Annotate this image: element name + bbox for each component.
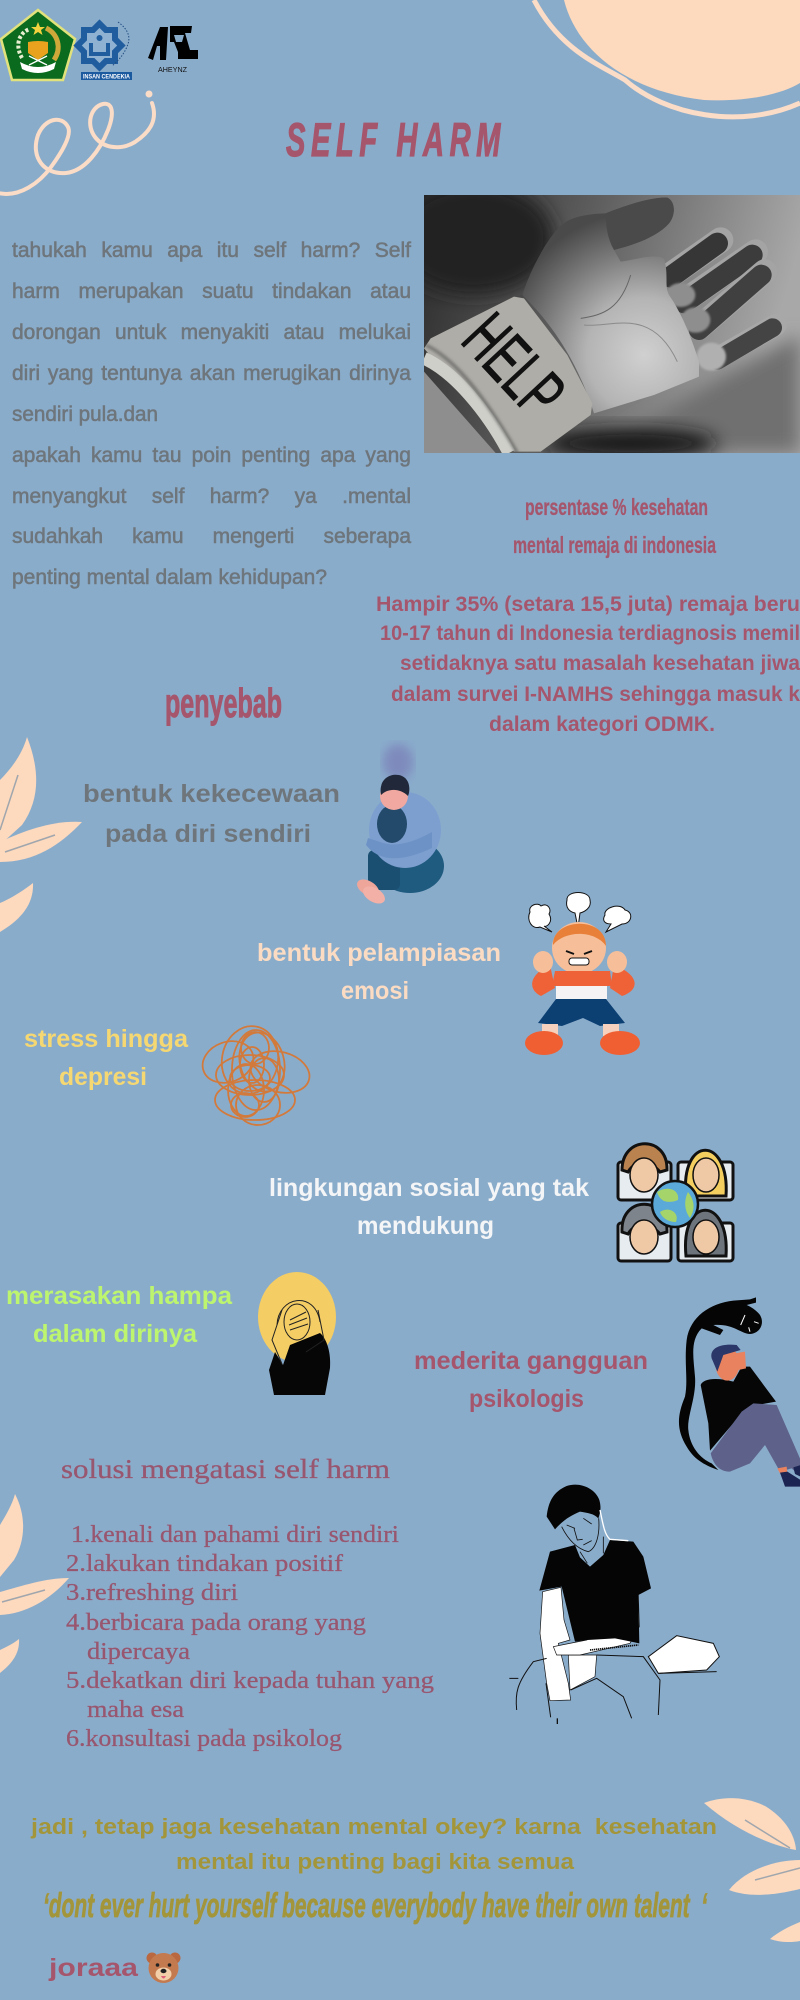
jeans outlines <box>509 1645 717 1724</box>
cause: lingkungan text <box>269 1174 589 1240</box>
intro text block: sendiri pula.dan <box>12 403 158 426</box>
solution list <box>66 1522 434 1752</box>
closing message: jadi , tetap jaga kesehatan mental okey? karna kesehatan <box>30 1814 717 1839</box>
cause: hampa text <box>6 1282 233 1348</box>
cause: lingkungan text: lingkungan sosial yang tak <box>269 1174 589 1202</box>
solution list: dipercaya <box>87 1639 190 1665</box>
speech clouds <box>529 892 631 932</box>
cause: kekecewaan text <box>83 780 340 848</box>
logo: ministry pentagon <box>1 10 75 80</box>
solution list: 3.refreshing diri <box>66 1580 238 1606</box>
icon: people around a globe <box>618 1144 733 1261</box>
cause: pelampiasan text: emosi <box>341 977 409 1005</box>
intro text block: tahukah kamu apa itu self harm? Self <box>12 239 411 262</box>
illustration: tangled scribble <box>197 1022 314 1125</box>
band lettering: HELP <box>448 299 580 432</box>
decoration: leaves bottom right <box>704 1798 800 1942</box>
intro text block <box>12 239 411 589</box>
heading: solusi: solusi mengatasi self harm <box>61 1454 390 1484</box>
heading: persentase: mental remaja di indonesia <box>513 532 716 558</box>
solution list: maha esa <box>87 1697 184 1723</box>
face lines <box>562 1518 603 1563</box>
palm <box>522 198 699 413</box>
intro text block: harm merupakan suatu tindakan atau <box>12 280 411 303</box>
decoration: leaves left upper <box>0 737 82 932</box>
closing message <box>30 1814 717 1874</box>
white highlight <box>600 1510 628 1541</box>
cause: stress text: stress hingga <box>24 1025 189 1053</box>
hair <box>547 1485 600 1529</box>
photo: wrist with help band <box>424 195 800 453</box>
heading: penyebab: penyebab <box>165 680 282 726</box>
illustration: angry boy <box>525 892 640 1055</box>
cause: gangguan text: mederita gangguan <box>414 1347 648 1375</box>
statistic text <box>376 593 800 736</box>
solution list: 6.konsultasi pada psikolog <box>66 1726 342 1752</box>
finger base pads <box>666 283 726 371</box>
logo: insan cendekia star: INSAN CENDEKIA <box>83 74 130 80</box>
decoration: leaves left lower <box>0 1494 69 1673</box>
cause: hampa text: merasakan hampa <box>6 1282 233 1310</box>
cause: kekecewaan text: bentuk kekecewaan <box>83 780 340 808</box>
solution list: 2.lakukan tindakan positif <box>66 1551 343 1577</box>
intro text block: menyangkut self harm? ya .mental <box>12 485 411 508</box>
logo: aheynz <box>148 26 198 74</box>
logo: aheynz: AHEYNZ <box>158 65 187 74</box>
statistic text: Hampir 35% (setara 15,5 juta) remaja beru <box>376 593 800 616</box>
author signature: joraaa <box>48 1954 139 1982</box>
cause: kekecewaan text: pada diri sendiri <box>105 820 311 848</box>
decoration: peach circle top right <box>534 0 800 117</box>
cause: gangguan text: psikologis <box>469 1385 584 1413</box>
intro text block: sudahkah kamu mengerti seberapa <box>12 525 411 548</box>
cause: hampa text: dalam dirinya <box>33 1320 198 1348</box>
logo: insan cendekia star <box>73 19 132 80</box>
raised knee <box>648 1636 719 1673</box>
solution list: 1.kenali dan pahami diri sendiri <box>71 1522 399 1548</box>
shirt <box>539 1540 651 1643</box>
intro text block: apakah kamu tau poin penting apa yang <box>12 444 411 467</box>
heading: persentase <box>513 494 716 558</box>
intro text block: penting mental dalam kehidupan? <box>12 566 327 589</box>
illustration: sad person sitting <box>354 744 444 907</box>
cause: lingkungan text: mendukung <box>357 1212 494 1240</box>
heading: persentase: persentase % kesehatan <box>525 494 708 520</box>
cause: stress text: depresi <box>59 1063 147 1091</box>
intro text block: diri yang tentunya akan merugikan dirinya <box>12 362 411 385</box>
cause: pelampiasan text: bentuk pelampiasan <box>257 939 501 967</box>
closing message: mental itu penting bagi kita semua <box>176 1849 575 1874</box>
statistic text: dalam survei I-NAMHS sehingga masuk k <box>391 683 800 706</box>
fingers <box>671 240 776 360</box>
title: SELF HARM <box>286 113 506 166</box>
logos row <box>1 10 198 80</box>
solution list: 4.berbicara pada orang yang <box>66 1610 366 1636</box>
solution list: 5.dekatkan diri kepada tuhan yang <box>66 1668 434 1694</box>
cause: stress text <box>24 1025 189 1091</box>
statistic text: dalam kategori ODMK. <box>489 713 715 736</box>
illustration: woman covering face <box>258 1272 336 1395</box>
statistic text: setidaknya satu masalah kesehatan jiwa <box>400 652 800 675</box>
cause: pelampiasan text <box>257 939 501 1005</box>
band <box>424 297 592 452</box>
decoration: loop scribble top left <box>0 92 154 194</box>
intro text block: dorongan untuk menyakiti atau melukai <box>12 321 411 344</box>
icon: bear face <box>146 1952 180 1983</box>
arms and waist <box>540 1587 571 1701</box>
cause: gangguan text <box>414 1347 648 1413</box>
illustration: person with dark shadow creature <box>679 1297 800 1487</box>
illustration: sketched sitting man <box>509 1485 719 1724</box>
